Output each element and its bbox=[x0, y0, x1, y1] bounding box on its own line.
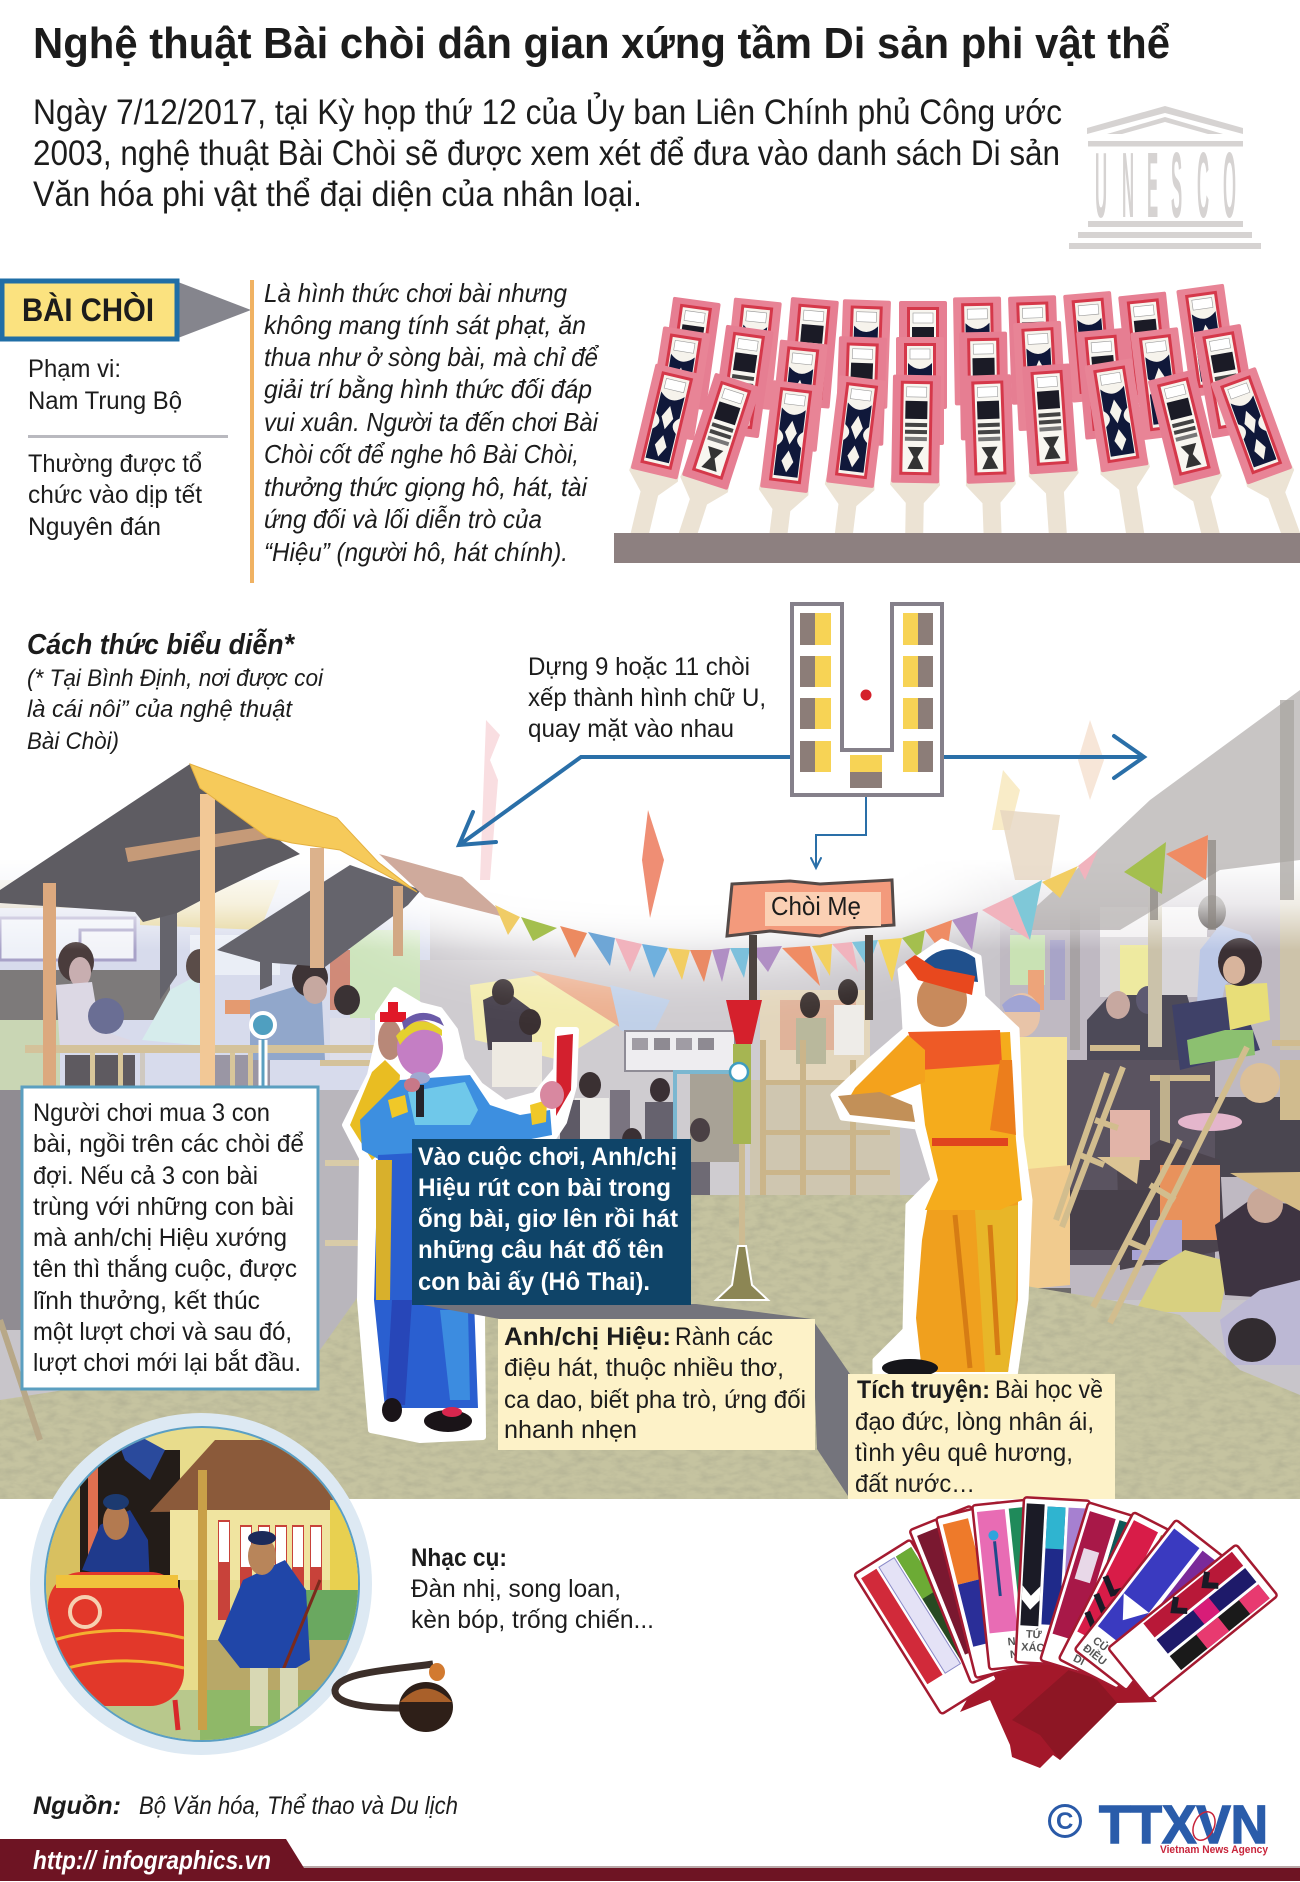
title: Nghệ thuật Bài chòi dân gian xứng tầm Di sản phi vật thể bbox=[33, 19, 1170, 68]
text: performance heading: là cái nôi” của nghệ thuật bbox=[27, 696, 293, 723]
photo: musicians inside circle bbox=[30, 1413, 372, 1755]
label: Bài Chòi: BÀI CHÒI bbox=[22, 292, 154, 328]
text: timing bbox=[28, 450, 202, 541]
text: description: ứng đối và lối diễn trò của bbox=[264, 504, 542, 534]
callout: player rules box: tên thì thắng cuộc, được bbox=[33, 1254, 297, 1283]
icon: song loan instrument bbox=[335, 1663, 453, 1732]
background photo: festival scene bbox=[0, 860, 1300, 1500]
fan card 5 bbox=[1015, 1497, 1090, 1666]
callout: navy note on drawing a card: Hiệu rút con bài trong bbox=[418, 1174, 671, 1202]
photo: fan of painted cards bbox=[854, 1497, 1278, 1768]
text: U layout note bbox=[528, 653, 766, 743]
text: instruments: kèn bóp, trống chiến... bbox=[411, 1606, 654, 1634]
icon: UNESCO temple logo: N bbox=[1122, 135, 1134, 238]
fan card 8: ĐIỀU bbox=[1080, 1642, 1109, 1668]
callout: Anh/chị Hiệu: điệu hát, thuộc nhiều thơ, bbox=[504, 1354, 784, 1382]
callout connector: grey bands to text boxes bbox=[417, 1304, 850, 1499]
callout: Tích truyện: đất nước… bbox=[855, 1470, 975, 1498]
callout: Anh/chị Hiệu: Rành các bbox=[675, 1323, 773, 1351]
callout: navy note on drawing a card: những câu hát đố tên bbox=[418, 1236, 664, 1264]
fan card 7: DI bbox=[1071, 1652, 1086, 1668]
scene fade to white bbox=[0, 858, 1300, 950]
callout: navy note on drawing a card: ống bài, giơ lên rồi hát bbox=[418, 1205, 679, 1233]
background: faint flags and right-hand hut bbox=[480, 690, 1300, 930]
fan card 5: TỨ bbox=[1026, 1628, 1043, 1641]
callout: player rules box: mà anh/chị Hiệu xướng bbox=[33, 1224, 287, 1252]
sign: Chòi Mẹ: Chòi Mẹ bbox=[771, 891, 861, 921]
callout: Tích truyện bbox=[848, 1374, 1115, 1499]
figure: male performer in orange bbox=[833, 941, 1030, 1377]
fan card 9 bbox=[1108, 1544, 1278, 1699]
fan card 3: MỎ bbox=[991, 1656, 1012, 1673]
callout: player rules box: đợi. Nếu cả 3 con bài bbox=[33, 1162, 258, 1190]
fan card 8 bbox=[1074, 1520, 1228, 1690]
fan card 6 bbox=[1040, 1502, 1152, 1679]
icon: UNESCO temple logo: E bbox=[1147, 135, 1158, 238]
callout: Anh/chị Hiệu bbox=[498, 1319, 815, 1450]
arrow: grey pointer bbox=[178, 282, 251, 338]
intro paragraph: Văn hóa phi vật thể đại diện của nhân loại. bbox=[33, 175, 642, 214]
text: timing: chức vào dịp tết bbox=[28, 481, 202, 509]
figure: Hiệu singer in blue bbox=[345, 990, 576, 1440]
callout: player rules box bbox=[22, 1013, 318, 1389]
panel: Bài Chòi definition bbox=[2, 278, 599, 583]
icon: UNESCO temple logo: C bbox=[1197, 135, 1209, 238]
text: U layout note: quay mặt vào nhau bbox=[528, 715, 734, 743]
text: description: thua như ở sòng bài, mà chỉ để bbox=[264, 342, 599, 372]
intro paragraph bbox=[33, 92, 1062, 214]
callout: navy note on drawing a card bbox=[412, 1139, 691, 1305]
figure: pole with card tube bbox=[716, 1000, 768, 1300]
logo: TTXVN: C bbox=[1056, 1808, 1073, 1835]
callout: Tích truyện: đạo đức, lòng nhân ái, bbox=[855, 1408, 1094, 1436]
icon: UNESCO temple logo: S bbox=[1171, 135, 1182, 238]
fan card 4: NHƯ bbox=[1007, 1634, 1034, 1648]
fan card 3: TỨ bbox=[990, 1645, 1010, 1661]
text: instruments: Nhạc cụ: bbox=[411, 1544, 507, 1572]
icon: UNESCO temple logo bbox=[1069, 106, 1261, 249]
callout: navy note on drawing a card: Vào cuộc chơi, Anh/chị bbox=[418, 1143, 677, 1171]
callout: Anh/chị Hiệu: nhanh nhẹn bbox=[504, 1416, 637, 1444]
text: description: Chòi cốt để nghe hô Bài Chòi, bbox=[264, 439, 579, 469]
callout: Anh/chị Hiệu: Anh/chị Hiệu: bbox=[504, 1323, 671, 1351]
text: scope bbox=[28, 355, 182, 415]
scene: ground bbox=[0, 1195, 1300, 1499]
text: description: giải trí bằng hình thức đối đáp bbox=[264, 374, 592, 404]
illustration: hut roofs and posts on the left bbox=[0, 764, 508, 1088]
scene: centre tents and crowd bbox=[420, 960, 900, 1210]
fan card 8: CỦ bbox=[1090, 1634, 1111, 1654]
scene: ladders bbox=[0, 1047, 1247, 1440]
callout: Anh/chị Hiệu: ca dao, biết pha trò, ứng đối bbox=[504, 1386, 806, 1414]
text: instruments bbox=[411, 1544, 654, 1634]
text: description: vui xuân. Người ta đến chơi Bài bbox=[264, 407, 599, 437]
footer bar with URL: http:// infographics.vn bbox=[33, 1845, 271, 1875]
arrows from the U diagram bbox=[459, 736, 1144, 868]
fan card 1 bbox=[854, 1540, 997, 1714]
fan card 7: NÀ bbox=[1077, 1641, 1097, 1660]
fan card 3 bbox=[936, 1502, 1040, 1678]
callout: player rules box: trùng với những con bài bbox=[33, 1193, 294, 1221]
text: source bbox=[33, 1792, 458, 1820]
fan card 4: NỌ bbox=[1009, 1648, 1028, 1661]
callout: player rules box: Người chơi mua 3 con bbox=[33, 1099, 270, 1127]
text: performance heading: Bài Chòi) bbox=[27, 728, 119, 755]
text: timing: Thường được tổ bbox=[28, 450, 202, 478]
logo: TTXVN: TTXVN bbox=[1099, 1795, 1268, 1855]
text: description: không mang tính sát phạt, ăn bbox=[264, 310, 586, 340]
callout: Tích truyện: Bài học về bbox=[995, 1376, 1103, 1404]
bunting flags bbox=[495, 835, 1208, 986]
intro paragraph: Ngày 7/12/2017, tại Kỳ họp thứ 12 của Ủy ban Liên Chính phủ Công ước bbox=[33, 92, 1062, 132]
fan card 5: XÁCH bbox=[1021, 1640, 1053, 1655]
sign: Chòi Mẹ bbox=[727, 880, 894, 1020]
footer bar with URL bbox=[0, 1839, 1300, 1881]
label: Bài Chòi bbox=[2, 281, 177, 339]
callout: player rules box: lượt chơi mới lại bắt đầu. bbox=[33, 1348, 301, 1377]
callout: Tích truyện: tình yêu quê hương, bbox=[855, 1439, 1073, 1467]
scene: right stands and crowd bbox=[1000, 860, 1300, 1365]
text: U layout note: xếp thành hình chữ U, bbox=[528, 684, 766, 712]
text: description: Là hình thức chơi bài nhưng bbox=[264, 278, 567, 308]
callout: Tích truyện: Tích truyện: bbox=[857, 1376, 990, 1404]
callout: player rules box: một lượt chơi và sau đó, bbox=[33, 1318, 292, 1346]
text: description: “Hiệu” (người hô, hát chính). bbox=[264, 537, 568, 567]
callout: navy note on drawing a card: con bài ấy (Hô Thai). bbox=[418, 1268, 650, 1296]
text: performance heading: (* Tại Bình Định, nơi được coi bbox=[27, 665, 324, 692]
callout: how the pole leads to the navy note bbox=[675, 1063, 748, 1139]
photo: rows of Bài Chòi cards on a shelf bbox=[614, 284, 1300, 563]
text: source: Bộ Văn hóa, Thể thao và Du lịch bbox=[139, 1792, 458, 1820]
text: scope: Phạm vi: bbox=[28, 355, 121, 383]
callout: player rules box: bài, ngồi trên các chòi để bbox=[33, 1130, 304, 1158]
scene: left stands bbox=[0, 860, 430, 1350]
text: U layout note: Dựng 9 hoặc 11 chòi bbox=[528, 653, 750, 681]
callout: player rules box: lĩnh thưởng, kết thúc bbox=[33, 1287, 260, 1315]
text: source: Nguồn: bbox=[33, 1792, 121, 1820]
text: scope: Nam Trung Bộ bbox=[28, 387, 182, 415]
logo: TTXVN: Vietnam News Agency bbox=[1160, 1844, 1269, 1856]
text: performance heading: Cách thức biểu diễn* bbox=[27, 627, 296, 661]
intro paragraph: 2003, nghệ thuật Bài Chòi sẽ được xem xét để đưa vào danh sách Di sản bbox=[33, 134, 1060, 173]
text: performance heading bbox=[27, 627, 324, 755]
text: description: thưởng thức giọng hô, hát, tài bbox=[264, 472, 588, 502]
diagram: U-shaped hut layout bbox=[792, 604, 942, 795]
icon: UNESCO temple logo: O bbox=[1223, 135, 1236, 238]
text: timing: Nguyên đán bbox=[28, 513, 161, 541]
fan card 4 bbox=[972, 1499, 1055, 1670]
text: description bbox=[264, 278, 599, 567]
icon: UNESCO temple logo: U bbox=[1095, 135, 1107, 238]
text: instruments: Đàn nhị, song loan, bbox=[411, 1575, 621, 1603]
fan card 7 bbox=[1059, 1512, 1192, 1689]
fan card 2 bbox=[909, 1506, 1032, 1683]
